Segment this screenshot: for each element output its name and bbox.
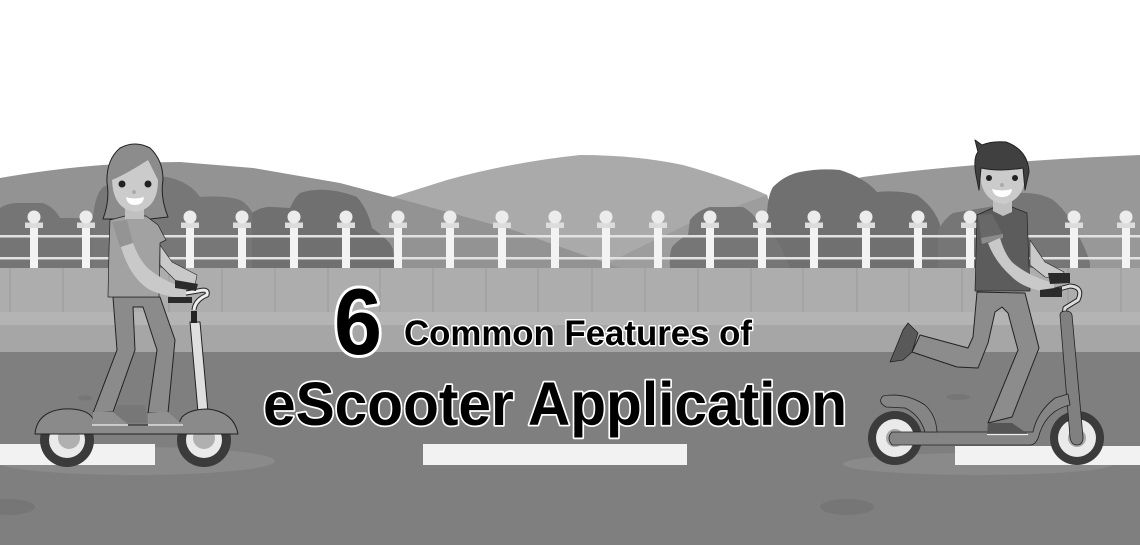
- girl face: [112, 160, 158, 212]
- boy torso: [975, 207, 1030, 291]
- boy hair: [975, 140, 1029, 190]
- girl shoes: [92, 412, 183, 425]
- boy back arm: [1030, 240, 1064, 280]
- road: [0, 352, 1140, 545]
- bushes: [0, 169, 1090, 268]
- girl back arm: [160, 245, 197, 285]
- boy kicked shoe: [890, 323, 918, 362]
- girl on scooter: [35, 144, 238, 467]
- hills: [0, 155, 1140, 270]
- boy face: [980, 165, 1025, 204]
- girl hair: [103, 144, 168, 219]
- boy sleeve: [978, 214, 1003, 244]
- boy neck: [993, 198, 1012, 216]
- girl inner leg: [113, 405, 147, 423]
- boy features: [986, 175, 1018, 197]
- boy on scooter: [868, 140, 1104, 465]
- girl scooter: [35, 290, 238, 467]
- title line two: eScooter Application: [263, 370, 847, 438]
- boy trousers: [912, 292, 1039, 423]
- title line one: Common Features of: [404, 314, 752, 353]
- girl gloves: [168, 280, 198, 303]
- title number: 6: [334, 269, 382, 374]
- girl features: [118, 180, 152, 205]
- boy gloves: [1040, 273, 1070, 297]
- boy standing shoe: [987, 423, 1028, 434]
- fence: [0, 210, 1140, 268]
- boy scooter: [868, 286, 1104, 465]
- girl sleeve: [112, 220, 133, 247]
- wall: [0, 268, 1140, 352]
- girl torso: [108, 216, 166, 297]
- title: [263, 269, 847, 438]
- girl neck: [125, 205, 144, 219]
- girl trousers: [93, 297, 175, 413]
- girl front arm: [121, 243, 186, 298]
- boy front arm: [988, 238, 1054, 293]
